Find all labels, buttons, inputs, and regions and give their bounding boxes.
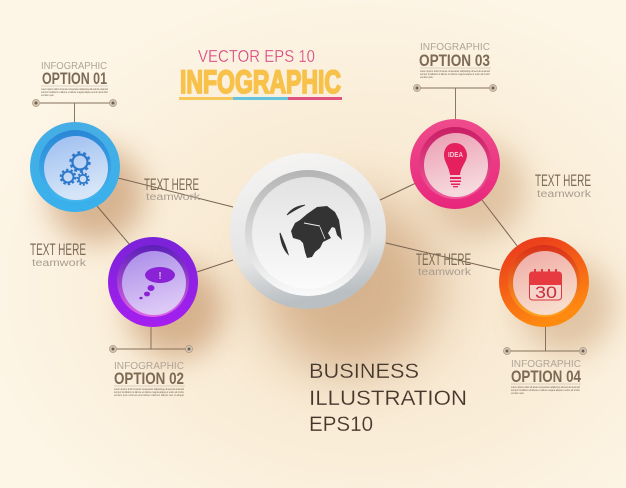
panel: option 02 label: OPTION 02 [114, 370, 184, 388]
center circle with globe [230, 153, 386, 309]
text block: text here 2: TEXT HERE [30, 240, 86, 259]
text block: text here 3: teamwork [537, 189, 592, 200]
circle shadows [49, 142, 615, 373]
title line: vector eps 10: VECTOR EPS 10 [198, 46, 315, 66]
text block: text here 2 [30, 240, 87, 269]
panel: option 01 label: INFOGRAPHIC [41, 60, 107, 72]
panel: option 02 label: INFOGRAPHIC [114, 360, 184, 372]
text block: text here 4: teamwork [418, 267, 472, 278]
icon: globe [280, 205, 342, 258]
panel: option 03 label: INFOGRAPHIC [420, 41, 490, 53]
panel: option 03 label: veniam quis [420, 76, 434, 79]
text block: business illustration: BUSINESS [309, 359, 419, 383]
panel: option 01 label: tempor incididunt ut labore et dolore magna aliqua ut enim ad minim [41, 91, 108, 94]
panel: option 03 label: Lorem ipsum dolor sit amet consectetur adipiscing elit sed do eiusmod [420, 70, 491, 73]
title [179, 46, 342, 100]
text block: text here 4 [416, 250, 472, 278]
text block: business illustration: ILLUSTRATION [309, 386, 467, 410]
circle: option 02 thought bubble [108, 237, 198, 327]
panel: option 04 label: OPTION 04 [511, 368, 582, 386]
title underline [179, 97, 342, 100]
panel: option 03 label [414, 41, 496, 120]
panel: option 01 label [32, 60, 116, 123]
panel: option 02 label: tempor incididunt ut labore et dolore magna aliqua ut enim ad minim [114, 391, 184, 394]
panel: option 03 label: tempor incididunt ut labore et dolore magna aliqua ut enim ad minim [420, 73, 490, 76]
text block: business illustration [309, 359, 467, 436]
panel: option 03 label: OPTION 03 [419, 52, 490, 70]
panel: option 02 label [110, 327, 192, 397]
panel: option 01 label: veniam quis [41, 94, 55, 97]
text block: text here 1 [144, 175, 201, 203]
panel: option 04 label: Lorem ipsum dolor sit amet consectetur adipiscing elit sed do eiusmod [511, 386, 581, 389]
panel: option 04 label: tempor incididunt ut labore et dolore magna aliqua ut enim ad minim [511, 389, 580, 392]
text block: text here 2: teamwork [32, 258, 87, 269]
panel: option 01 label: OPTION 01 [42, 70, 107, 88]
text block: text here 4: TEXT HERE [416, 250, 471, 269]
connector lines [97, 178, 518, 272]
panel: option 04 label: INFOGRAPHIC [511, 358, 581, 370]
text block: text here 1: TEXT HERE [144, 175, 199, 194]
panel: option 04 label: veniam quis [511, 392, 525, 395]
icon: gears [61, 152, 90, 185]
text block: business illustration: EPS10 [309, 412, 373, 436]
title line: infographic: INFOGRAPHIC [180, 64, 341, 100]
panel: option 01 label: Lorem ipsum dolor sit amet consectetur adipiscing elit sed do eiusmod [41, 88, 109, 91]
panel: option 02 label: Lorem ipsum dolor sit amet consectetur adipiscing elit sed do eiusmod [114, 388, 185, 391]
panel: option 04 label [504, 327, 586, 395]
text block: text here 1: teamwork [146, 192, 201, 203]
panel: option 02 label: veniam quis nostrud exercitation ullamco laboris nisi ut aliquip [114, 394, 185, 397]
circle: option 04 calendar [499, 237, 589, 327]
icon: calendar: 30 [535, 283, 557, 302]
icon: bulb: IDEA [448, 152, 463, 159]
icon: thought bubble: ! [158, 271, 162, 282]
text block: text here 3 [535, 171, 592, 200]
circle: option 03 idea bulb [410, 119, 500, 209]
circle: option 01 gears [30, 122, 120, 212]
